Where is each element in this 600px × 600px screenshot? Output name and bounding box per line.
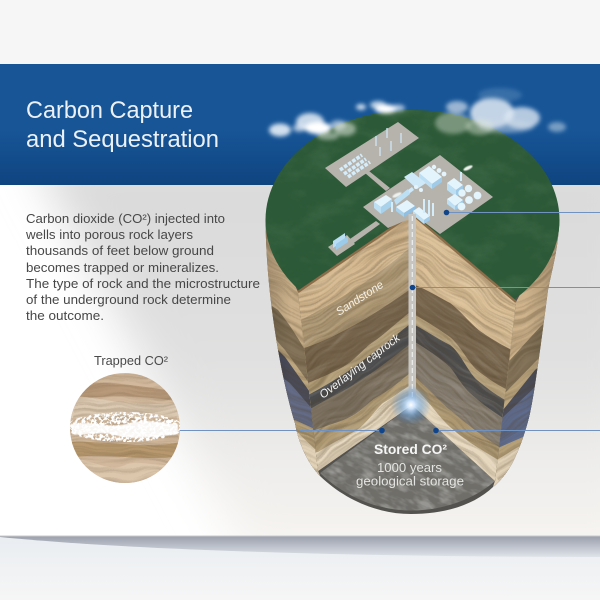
label: 1000 years geological storage (356, 460, 464, 488)
industrial buildings (333, 166, 463, 250)
description text: Carbon dioxide (CO²) injected into (26, 212, 225, 226)
clouds (269, 88, 566, 140)
cylinder base rim (266, 220, 559, 514)
steam plumes (392, 164, 473, 199)
description text: The type of rock and the microstructure (26, 277, 260, 291)
title: and Sequestration (26, 126, 219, 153)
label: Stored CO2: Stored CO² (374, 441, 447, 457)
blue header band (0, 64, 600, 185)
injection well (408, 214, 416, 404)
description text: the outcome. (26, 309, 104, 323)
brown cut edge along the wedge (298, 214, 516, 302)
concrete platforms and roads (325, 122, 493, 256)
description text: becomes trapped or mineralizes. (26, 261, 219, 275)
callout: mineralized CO2 (433, 428, 600, 433)
callout: well (410, 285, 600, 290)
trapped CO2 label: Trapped CO² (94, 354, 168, 368)
description text: thousands of feet below ground (26, 244, 214, 258)
right cut face strata (414, 219, 516, 481)
description text: of the underground rock determine (26, 293, 231, 307)
stone floor of stored CO2 (320, 409, 494, 510)
panel drop shadow under the page (0, 536, 600, 600)
wind turbines (376, 128, 401, 156)
right outer strata (493, 230, 559, 487)
trapped CO2 rock sample circle (66, 373, 184, 483)
CO2 glow at base of well (391, 385, 431, 425)
left cloud (269, 113, 356, 140)
title (26, 97, 219, 153)
solar array (340, 155, 370, 177)
green ground surface (266, 110, 560, 299)
middle cloud (356, 101, 405, 114)
connector line from trapped CO2 sample to the cylinder (178, 430, 300, 432)
left outer strata (266, 226, 320, 476)
callout: trapped CO2 in storage rock (300, 428, 385, 433)
label: Overlaying caprock: Overlaying caprock (318, 331, 404, 401)
right cloud (435, 88, 566, 135)
description text (25, 212, 260, 323)
surface facilities (325, 122, 493, 256)
label: 1000 years geological storage: geological storage (356, 474, 464, 488)
label: Sandstone: Sandstone (334, 279, 386, 319)
storage tanks (414, 165, 481, 210)
title: Carbon Capture (26, 97, 193, 124)
white content panel with soft shadow (0, 185, 600, 536)
layered rock cylinder (266, 110, 560, 514)
label: 1000 years geological storage: 1000 years (377, 460, 442, 475)
callout: surface facility (444, 210, 600, 215)
description text: wells into porous rock layers (25, 228, 193, 242)
left cut face strata (298, 219, 408, 471)
